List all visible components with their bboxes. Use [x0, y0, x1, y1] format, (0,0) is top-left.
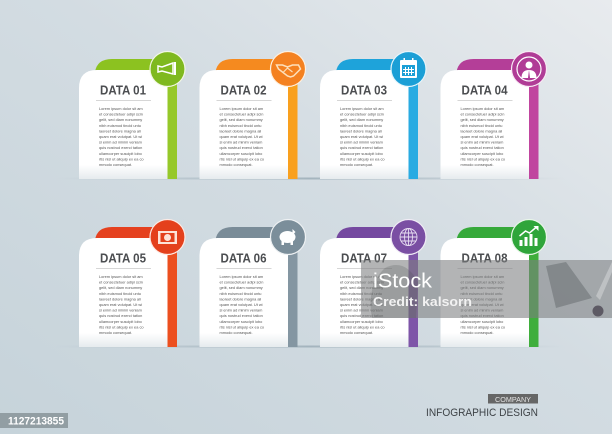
text block: quam erat volutpat. Ut wi [99, 134, 142, 139]
text block: si enim ad minim veniam [340, 140, 383, 145]
text block: ullamcorper suscipit lobo [460, 151, 503, 156]
text block: mmodo consequat. [220, 162, 253, 167]
text block: rtis nisl ut aliquip ex ea co [460, 324, 505, 329]
text block: quam erat volutpat. Ut wi [220, 134, 263, 139]
heading: DATA 07 [341, 250, 387, 266]
text block: quam erat volutpat. Ut wi [340, 302, 383, 307]
text block: quam erat volutpat. Ut wi [99, 302, 142, 307]
text block: laoreet dolore magna ali [99, 296, 141, 301]
icon: globe [391, 220, 426, 254]
company label [488, 394, 538, 404]
text block [460, 106, 505, 167]
text block: quis nostrud exerci tation [99, 313, 142, 318]
text block: rtis nisl ut aliquip ex ea co [220, 324, 264, 329]
text block: rtis nisl ut aliquip ex ea co [340, 324, 385, 329]
text block: si enim ad minim veniam [99, 308, 142, 313]
panel: data 02 [200, 52, 306, 179]
text block: et consectetuer adipi scin [460, 280, 504, 285]
text block: rtis nisl ut aliquip ex ea co [460, 156, 505, 161]
text block: mmodo consequat. [220, 330, 253, 335]
text block: laoreet dolore magna ali [220, 128, 261, 133]
text block [99, 274, 144, 335]
text block: ullamcorper suscipit lobo [99, 151, 142, 156]
icon: piggy bank [270, 220, 306, 254]
text block: ullamcorper suscipit lobo [220, 151, 262, 156]
text block: laoreet dolore magna ali [340, 296, 382, 301]
text block: mmodo consequat. [99, 330, 132, 335]
text block: et consectetuer adipi scin [220, 280, 263, 285]
text block: Lorem ipsum dolor sit am [460, 106, 504, 111]
text block: mmodo consequat. [340, 162, 373, 167]
text block: si enim ad minim veniam [460, 140, 503, 145]
text block: mmodo consequat. [460, 330, 494, 335]
icon: megaphone [150, 52, 185, 86]
text block: ullamcorper suscipit lobo [220, 319, 262, 324]
text block: nibh euismod tincid untu [460, 291, 502, 296]
floor shadows [55, 178, 565, 348]
text block: quis nostrud exerci tation [340, 313, 383, 318]
text block: laoreet dolore magna ali [460, 296, 502, 301]
text block: ullamcorper suscipit lobo [460, 319, 503, 324]
text block [220, 106, 264, 167]
icon: growth chart [512, 220, 546, 254]
heading: DATA 03 [341, 82, 387, 98]
panel: data 04 [440, 52, 546, 179]
heading: DATA 02 [220, 82, 266, 98]
text block: quis nostrud exerci tation [460, 145, 504, 150]
text block: quis nostrud exerci tation [460, 313, 504, 318]
text block: gelit, sed diam nonummy [99, 117, 142, 122]
text block: quam erat volutpat. Ut wi [220, 302, 263, 307]
panel: data 01 [79, 52, 185, 179]
text block: si enim ad minim veniam [99, 140, 142, 145]
text block: Lorem ipsum dolor sit am [340, 274, 384, 279]
text block: laoreet dolore magna ali [99, 128, 141, 133]
icon: calendar [391, 52, 426, 86]
heading: DATA 05 [100, 250, 146, 266]
text block: si enim ad minim veniam [460, 308, 503, 313]
heading: DATA 08 [462, 250, 508, 266]
icon: handshake [270, 52, 306, 86]
text block: gelit, sed diam nonummy [460, 117, 504, 122]
text block [99, 106, 144, 167]
text block: si enim ad minim veniam [220, 308, 262, 313]
text block: si enim ad minim veniam [220, 140, 262, 145]
text block: gelit, sed diam nonummy [220, 117, 263, 122]
text block: quam erat volutpat. Ut wi [460, 302, 504, 307]
watermark band [361, 260, 612, 318]
watermark band: Credit: kalsorn [373, 294, 472, 309]
text block: quis nostrud exerci tation [99, 145, 142, 150]
text block: nibh euismod tincid untu [220, 123, 261, 128]
text block: mmodo consequat. [99, 162, 132, 167]
icon: businessman [512, 52, 546, 86]
text block: rtis nisl ut aliquip ex ea co [99, 324, 144, 329]
text block: gelit, sed diam nonummy [220, 285, 263, 290]
text block: nibh euismod tincid untu [340, 123, 382, 128]
panel: data 06 [200, 220, 306, 347]
text block: gelit, sed diam nonummy [460, 285, 504, 290]
text block [340, 106, 385, 167]
text block: nibh euismod tincid untu [340, 291, 382, 296]
text block: laoreet dolore magna ali [220, 296, 261, 301]
text block: Lorem ipsum dolor sit am [340, 106, 384, 111]
panel: data 03 [320, 52, 426, 179]
icon: banknote [150, 220, 185, 254]
text block: ullamcorper suscipit lobo [99, 319, 142, 324]
heading: DATA 04 [462, 82, 508, 98]
text block: quis nostrud exerci tation [220, 145, 263, 150]
text block [460, 274, 505, 335]
text block: et consectetuer adipi scin [460, 112, 504, 117]
text block: Lorem ipsum dolor sit am [220, 274, 263, 279]
text block: gelit, sed diam nonummy [99, 285, 142, 290]
text block: Lorem ipsum dolor sit am [220, 106, 263, 111]
text block: gelit, sed diam nonummy [340, 117, 383, 122]
text block: rtis nisl ut aliquip ex ea co [340, 156, 385, 161]
text block: quis nostrud exerci tation [340, 145, 383, 150]
panel: data 07 [320, 220, 426, 347]
panel: data 08 [440, 220, 546, 347]
text block: Lorem ipsum dolor sit am [460, 274, 504, 279]
text block: et consectetuer adipi scin [340, 112, 384, 117]
text block: ullamcorper suscipit lobo [340, 151, 383, 156]
text block: mmodo consequat. [460, 162, 494, 167]
text block: quam erat volutpat. Ut wi [340, 134, 383, 139]
text block: Lorem ipsum dolor sit am [99, 106, 143, 111]
text block: quam erat volutpat. Ut wi [460, 134, 504, 139]
text block: nibh euismod tincid untu [460, 123, 502, 128]
company label: COMPANY [495, 395, 531, 404]
text block: et consectetuer adipi scin [99, 112, 143, 117]
text block: et consectetuer adipi scin [340, 280, 384, 285]
text block: laoreet dolore magna ali [340, 128, 382, 133]
text block: nibh euismod tincid untu [99, 123, 141, 128]
text block: nibh euismod tincid untu [99, 291, 141, 296]
text block: laoreet dolore magna ali [460, 128, 502, 133]
heading: DATA 01 [100, 82, 146, 98]
text block: rtis nisl ut aliquip ex ea co [220, 156, 264, 161]
text block: quis nostrud exerci tation [220, 313, 263, 318]
text block [340, 274, 385, 335]
text block: si enim ad minim veniam [340, 308, 383, 313]
text block: et consectetuer adipi scin [220, 112, 263, 117]
title: INFOGRAPHIC DESIGN [426, 407, 538, 419]
panel: data 05 [79, 220, 185, 347]
image id badge: 1127213855 [8, 416, 64, 428]
text block: Lorem ipsum dolor sit am [99, 274, 143, 279]
text block: ullamcorper suscipit lobo [340, 319, 383, 324]
heading: DATA 06 [220, 250, 266, 266]
text block [220, 274, 264, 335]
text block: rtis nisl ut aliquip ex ea co [99, 156, 144, 161]
watermark text: iStock [373, 270, 433, 292]
text block: gelit, sed diam nonummy [340, 285, 383, 290]
text block: mmodo consequat. [340, 330, 373, 335]
text block: nibh euismod tincid untu [220, 291, 261, 296]
text block: et consectetuer adipi scin [99, 280, 143, 285]
